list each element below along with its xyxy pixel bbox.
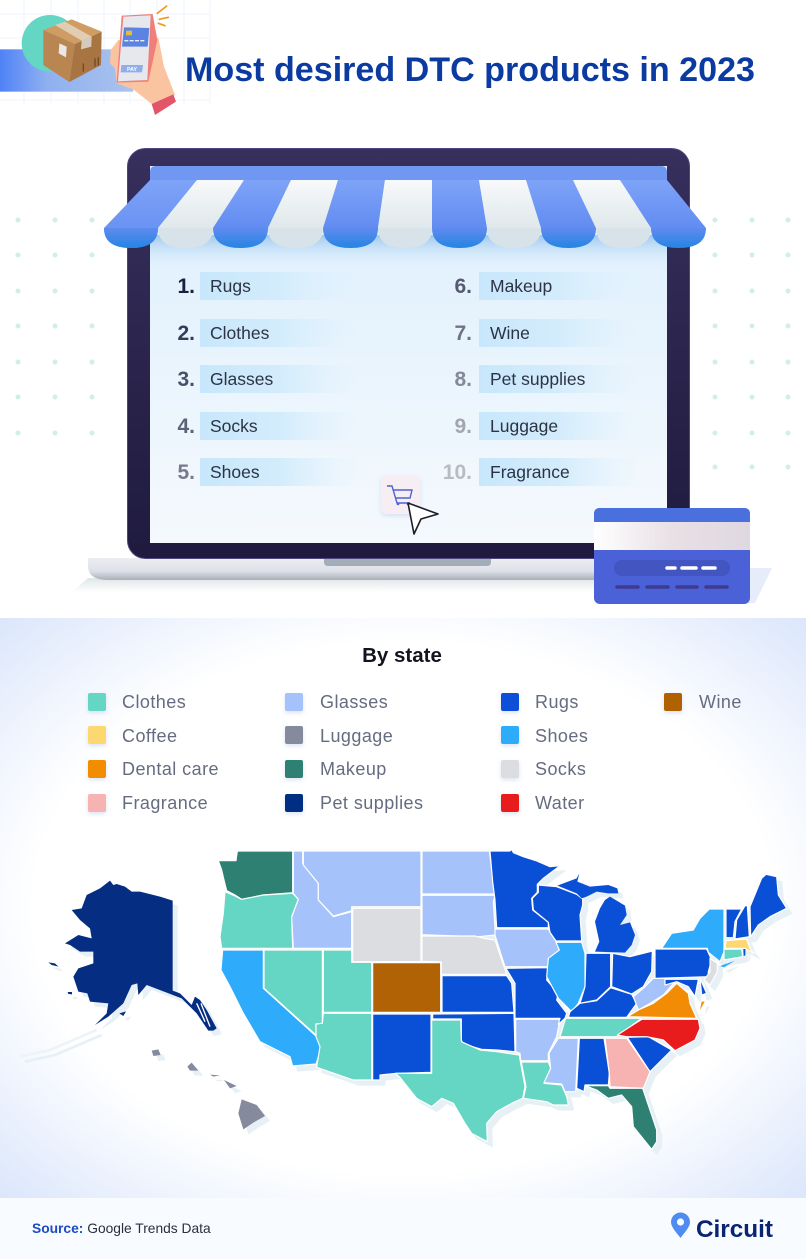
legend: Clothes [122, 692, 186, 712]
legend: Coffee [122, 726, 177, 746]
heading: by state: By state [362, 644, 442, 667]
ranked list of products: Makeup [490, 276, 552, 296]
panel: by state [0, 618, 806, 1199]
awning [104, 166, 706, 248]
legend: Makeup [320, 759, 387, 779]
ranked list of products: 8. [454, 368, 472, 391]
icon: shopping cart and cursor [381, 475, 438, 534]
ranked list of products: Wine [490, 323, 530, 343]
ranked list of products [177, 272, 639, 486]
title: Most desired DTC products in 2023 [185, 51, 755, 89]
ranked list of products: Fragrance [490, 462, 570, 482]
ranked list of products: 6. [454, 275, 472, 298]
ranked list of products: Shoes [210, 462, 260, 482]
ranked list of products: Socks [210, 416, 258, 436]
ranked list of products: Glasses [210, 369, 273, 389]
ranked list of products: 9. [454, 415, 472, 438]
legend: Wine [699, 692, 742, 712]
ranked list of products: 5. [177, 461, 195, 484]
Alaska and Hawaii [20, 881, 265, 1129]
header illustration: parcel and phone in hand [0, 6, 176, 115]
logo: Circuit [671, 1212, 773, 1243]
ranked list of products: 2. [177, 322, 195, 345]
legend: Water [535, 793, 585, 813]
ranked list of products: 7. [454, 322, 472, 345]
legend: Glasses [320, 692, 388, 712]
ranked list of products: 1. [177, 275, 195, 298]
legend: Rugs [535, 692, 579, 712]
central and eastern states [395, 849, 787, 1149]
legend: Dental care [122, 759, 219, 779]
legend: Luggage [320, 726, 393, 746]
header illustration: parcel and phone in hand: PAY [127, 67, 138, 73]
ranked list of products: 10. [443, 461, 472, 484]
ranked list of products: Pet supplies [490, 369, 586, 389]
ranked list of products: Rugs [210, 276, 251, 296]
ranked list of products: 4. [177, 415, 195, 438]
footer [0, 1198, 806, 1259]
legend: Socks [535, 759, 586, 779]
legend: Pet supplies [320, 793, 423, 813]
legend [88, 692, 742, 813]
icon: credit card [594, 508, 772, 604]
legend: Fragrance [122, 793, 208, 813]
map of the United States by most desired product [20, 849, 787, 1149]
background grid and dots [0, 0, 790, 470]
logo: Circuit: Circuit [696, 1216, 773, 1243]
source note: Source: Google Trends Data [32, 1221, 211, 1236]
ranked list of products: 3. [177, 368, 195, 391]
ranked list of products: Luggage [490, 416, 558, 436]
ranked list of products: Clothes [210, 323, 270, 343]
laptop illustration [72, 148, 740, 592]
western states [218, 851, 441, 1080]
legend: Shoes [535, 726, 588, 746]
